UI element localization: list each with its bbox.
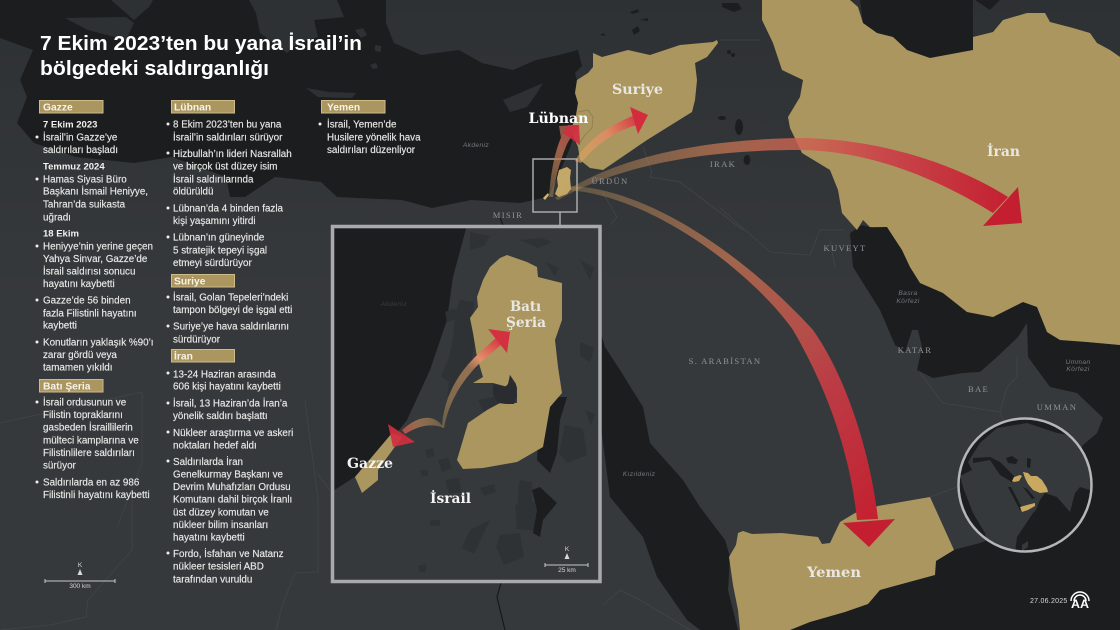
inset arrow: to West Bank — [442, 329, 510, 428]
sea labels: Körfezi — [1066, 366, 1090, 373]
inset scale bar: 25 km — [558, 567, 576, 574]
panel: Batı Şeria: Filistin topraklarını — [43, 410, 123, 421]
country labels: MISIR — [493, 210, 523, 220]
panel: Gazze: Yahya Sinvar, Gazze’de — [43, 254, 148, 265]
label: Gazze: Gazze — [347, 456, 393, 472]
panel: İran: Nükleer araştırma ve askeri — [173, 428, 293, 439]
panel: İran: İsrail, 13 Haziran’da İran’a — [173, 398, 288, 410]
panel: Lübnan: kişi yaşamını yitirdi — [173, 216, 256, 227]
scale bar: 300 km — [45, 562, 115, 590]
country: Iran — [762, 0, 1120, 345]
panel: Suriye: sürdürüyor — [173, 334, 221, 346]
label: Batı Şeria: Batı — [510, 299, 541, 315]
panel: Batı Şeria: Filistinlilere saldırıları — [43, 448, 135, 459]
country: Syria and Lebanon — [571, 40, 718, 170]
map: small lakes — [600, 3, 750, 165]
panel: Lübnan: İsrail’in saldırıları sürüyor — [173, 132, 283, 144]
panel: Lübnan: 8 Ekim 2023’ten bu yana — [173, 120, 282, 130]
panel: Gazze: hayatını kaybetti — [43, 279, 115, 290]
inset arrow: to Gaza — [388, 418, 444, 447]
panel: Gazze: kaybetti — [43, 320, 77, 332]
panel: İran: tarafından vuruldu — [173, 574, 252, 586]
panel: İran: hayatını kaybetti — [173, 532, 245, 544]
sea labels: Körfezi — [896, 298, 920, 305]
country labels: S. ARABİSTAN — [689, 356, 761, 366]
title: 7 Ekim 2023’ten bu yana İsrail’in — [40, 32, 362, 55]
title: bölgedeki saldırganlığı — [40, 58, 269, 80]
inset scale bar: K — [565, 546, 570, 553]
mini Gaza and West Bank — [543, 167, 571, 200]
arrow: to Syria — [575, 107, 648, 163]
sea labels: Akdeniz — [462, 142, 489, 149]
country labels: KUVEYT — [823, 243, 867, 253]
panel: Yemen: İsrail, Yemen’de — [327, 120, 397, 130]
panel: Gazze: Gazze’de 56 binden — [43, 296, 131, 306]
AA logo — [1071, 592, 1089, 611]
label: Batı Şeria — [506, 299, 546, 331]
panel: Batı Şeria: gasbeden İsraillilerin — [43, 422, 133, 434]
date: 27.06.2025 — [1030, 598, 1068, 605]
inset Gaza — [355, 433, 402, 493]
country labels: ÜRDÜN — [591, 176, 629, 186]
inset West Bank — [457, 255, 562, 469]
globe locator — [957, 417, 1093, 553]
panel: Gazze: 7 Ekim 2023 — [43, 120, 97, 130]
panel: Gazze: İsrail saldırısı sonucu — [43, 266, 135, 278]
panel: Gazze: Heniyye’nin yerine geçen — [43, 242, 153, 252]
panel: Batı Şeria: İsrail ordusunun ve — [43, 398, 127, 408]
panel: İran: Devrim Muhafızları Ordusu — [173, 482, 291, 493]
panel: Batı Şeria — [36, 380, 150, 501]
title — [40, 32, 362, 80]
panel: İran: Saldırılarda İran — [173, 457, 243, 468]
panel: Lübnan: İsrail saldırılarında — [173, 174, 254, 186]
panel: Lübnan: ve birçok üst düzey isim — [173, 162, 278, 172]
country labels: İran — [987, 141, 1020, 160]
country labels: BAE — [968, 384, 989, 394]
inset scale bar — [545, 546, 588, 574]
heading: Gazze — [40, 100, 103, 114]
panel: Suriye: tampon bölgeyi de işgal etti — [173, 305, 292, 316]
panel: İran: Komutanı dahil birçok İranlı — [173, 494, 292, 506]
panel: İran — [166, 350, 293, 586]
panel: Lübnan: öldürüldü — [173, 186, 214, 198]
globe highlighted countries — [1012, 472, 1048, 512]
inset panel: Israel, Gaza and West Bank — [332, 226, 600, 582]
inset sea label: Akdeniz — [380, 301, 408, 308]
arrow: to Lebanon — [549, 125, 580, 197]
panel: Batı Şeria: sürüyor — [43, 460, 77, 472]
panel: Gazze: Tahran’da suikasta — [43, 200, 126, 210]
arrow: to Iran — [555, 138, 1022, 226]
heading: Yemen: Yemen — [327, 102, 360, 114]
country labels: Lübnan — [528, 111, 588, 127]
panel: Gazze: İsrail’in Gazze’ye — [43, 132, 118, 144]
sea labels: Basra — [898, 290, 918, 297]
country labels: KATAR — [898, 345, 932, 355]
globe seas — [960, 420, 1090, 550]
panel: Lübnan: Hizbullah’ın lideri Nasrallah — [173, 149, 292, 160]
heading: Suriye: Suriye — [174, 276, 206, 288]
panel: Gazze: Hamas Siyasi Büro — [43, 174, 127, 186]
panel: Batı Şeria: Saldırılarda en az 986 — [43, 478, 140, 488]
panel: İran: Fordo, İsfahan ve Natanz — [173, 549, 284, 560]
panel: Gazze: saldırıları başladı — [43, 145, 118, 156]
panel: İran: nükleer bilim insanları — [173, 520, 268, 531]
panel: Suriye — [166, 274, 292, 346]
panel: Gazze: Konutların yaklaşık %90’ı — [43, 338, 154, 348]
panel: Batı Şeria: Filistinli hayatını kaybetti — [43, 490, 150, 501]
panel: Gazze — [36, 100, 154, 374]
inset urban areas — [418, 232, 595, 572]
panel: Lübnan: Lübnan’da 4 binden fazla — [173, 204, 284, 214]
panel: İran: nükleer tesisleri ABD — [173, 562, 264, 572]
panel: İran: 606 kişi hayatını kaybetti — [173, 382, 281, 392]
inset sea — [334, 228, 466, 490]
country labels: Yemen — [806, 565, 861, 581]
label: Batı Şeria: Şeria — [506, 315, 546, 331]
country labels: UMMAN — [1037, 402, 1077, 412]
panel: Gazze: Başkanı İsmail Heniyye, — [43, 186, 148, 198]
panel: Suriye: Suriye’ye hava saldırılarını — [173, 322, 289, 332]
sea labels: Umman — [1065, 359, 1091, 366]
inset Dead Sea and Lake — [532, 397, 567, 537]
scale bar: 300 km: 300 km — [69, 583, 91, 590]
panel: İran: 13-24 Haziran arasında — [173, 370, 276, 380]
panel: İran: üst düzey komutan ve — [173, 508, 269, 518]
map: Mediterranean lands and islands — [65, 0, 543, 112]
heading: Lübnan: Lübnan — [174, 102, 211, 114]
panel: Gazze: 18 Ekim — [43, 228, 79, 240]
panel: Lübnan — [166, 100, 292, 269]
panel: Batı Şeria: mülteci kamplarına ve — [43, 436, 139, 446]
heading: İran — [172, 350, 234, 362]
panel: Gazze: tamamen yıkıldı — [43, 362, 112, 374]
scale bar: 300 km: K — [78, 562, 83, 569]
panel: Lübnan: Lübnan’ın güneyinde — [173, 232, 265, 244]
sea labels — [462, 142, 1091, 478]
small overview box and connector — [533, 159, 577, 225]
country: Yemen — [729, 497, 954, 630]
country labels: IRAK — [710, 159, 736, 169]
heading: Gazze: Gazze — [43, 102, 73, 114]
panel: Gazze: zarar gördü veya — [43, 350, 117, 361]
AA logo: AA — [1071, 597, 1089, 611]
panel: Yemen: Husilere yönelik hava — [327, 132, 421, 144]
country labels: Suriye — [612, 82, 663, 98]
arrow: to Yemen — [565, 186, 895, 547]
label: İsrail: İsrail — [430, 488, 471, 507]
panel: İran: noktaları hedef aldı — [173, 440, 257, 452]
heading: Lübnan — [172, 100, 234, 114]
panel: İran: yönelik saldırı başlattı — [173, 411, 268, 422]
sea labels: Kızıldeniz — [623, 471, 656, 478]
panel: Suriye: İsrail, Golan Tepeleri’ndeki — [173, 292, 288, 304]
heading: İran: İran — [174, 350, 193, 362]
panel: Lübnan: 5 stratejik tepeyi işgal — [173, 246, 267, 256]
panel: İran: Genelkurmay Başkanı ve — [173, 470, 283, 480]
country labels — [493, 82, 1077, 581]
panel: Gazze: fazla Filistinli hayatını — [43, 308, 137, 320]
globe Madagascar — [1022, 541, 1028, 551]
Lebanon outline — [578, 110, 593, 145]
panel: Lübnan: etmeyi sürdürüyor — [173, 258, 253, 269]
panel: Gazze: uğradı — [43, 212, 71, 224]
inset Jerusalem area — [493, 375, 517, 404]
heading: Batı Şeria: Batı Şeria — [43, 382, 91, 392]
panel: Gazze: Temmuz 2024 — [43, 162, 105, 172]
panel: Yemen: saldırıları düzenliyor — [327, 145, 416, 156]
panel: Yemen — [318, 100, 421, 156]
